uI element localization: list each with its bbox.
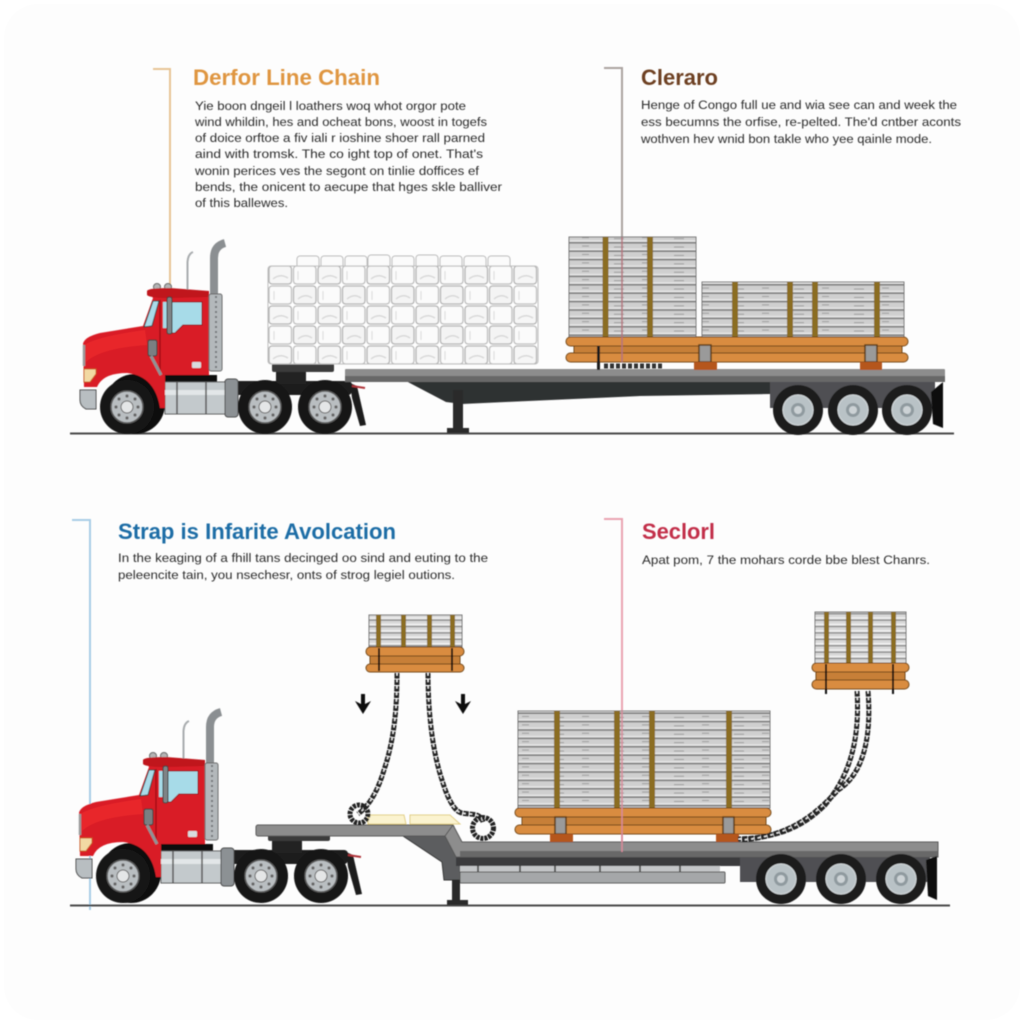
body text xyxy=(640,98,961,146)
right chain xyxy=(428,673,494,838)
lower deck xyxy=(445,825,938,857)
rear flap xyxy=(926,856,937,900)
left chain xyxy=(350,673,397,823)
panel: bottom-left callout xyxy=(72,519,488,910)
body text: Yie boon dngeil l loathers woq whot orgor pote xyxy=(195,99,466,113)
body text: aind with tromsk. The co ight top of onet. That's xyxy=(195,147,483,161)
body text: wind whildin, hes and ocheat bons, woost in togefs xyxy=(194,115,487,129)
leader overlap on cargo xyxy=(621,237,623,362)
landing leg xyxy=(452,880,460,902)
panel: bottom-right callout xyxy=(604,519,930,852)
yellow straps on deck xyxy=(368,815,460,824)
body text: bends, the onicent to aecupe that hges skle balliver xyxy=(195,180,502,194)
panel: top-right callout xyxy=(604,65,961,362)
upper deck xyxy=(256,825,454,836)
body text: Apat pom, 7 the mohars corde bbe blest Chanrs. xyxy=(642,553,930,567)
body text: In the keaging of a fhill tans decinged oo sind and euting to the xyxy=(118,551,488,565)
orange bracket leader xyxy=(153,69,170,285)
body text: of doice orftoe a fiv iali r ioshine shoer rall parned xyxy=(195,131,485,145)
arrow: right down xyxy=(455,694,471,714)
grey bracket leader xyxy=(604,68,622,362)
top trailer xyxy=(345,369,945,435)
top board cargo left xyxy=(569,237,696,337)
top truck tractor xyxy=(80,243,366,434)
body text: ess becumns the orfise, re-pelted. The'd cntber aconts xyxy=(641,115,961,129)
bottom ground line xyxy=(70,904,950,906)
trailer under-frame xyxy=(404,380,770,404)
rear wheels xyxy=(773,385,823,435)
body text: peleencite tain, you nsechesr, onts of strog legiel outions. xyxy=(118,568,455,582)
top ground line xyxy=(70,432,954,434)
hanging bundle left xyxy=(366,615,464,672)
panel: top-left callout xyxy=(153,65,502,285)
rear wheels xyxy=(756,854,806,904)
body text: of this ballewes. xyxy=(195,196,288,210)
rear flap xyxy=(931,382,943,428)
landing leg xyxy=(453,390,463,430)
heading: Cleraro: Cleraro xyxy=(641,65,718,90)
pink bracket leader xyxy=(604,519,622,852)
body text: Henge of Congo full ue and wia see can and week the xyxy=(641,98,957,112)
heading: Derfor Line Chain: Derfor Line Chain xyxy=(193,65,380,90)
far right twin chain xyxy=(738,691,869,840)
bottom large board cargo xyxy=(518,711,770,808)
heading: Seclorl: Seclorl xyxy=(642,519,715,544)
arrow: left down xyxy=(355,694,371,714)
top board cargo right xyxy=(702,282,904,337)
bottom truck tractor xyxy=(76,712,362,903)
blue bracket leader xyxy=(72,520,90,910)
gooseneck frame xyxy=(403,836,460,880)
under-frame xyxy=(456,856,740,866)
top white sack cargo xyxy=(268,255,538,364)
leader overlap on bottom cargo xyxy=(621,711,623,852)
top timber skid xyxy=(566,337,908,370)
bottom timber skid xyxy=(515,808,771,842)
body text: wothven hev wnid bon takle who yee qainle mode. xyxy=(640,132,932,146)
bottom trailer xyxy=(256,825,938,905)
body text xyxy=(194,99,502,210)
body text: wonin perices ves the segont on tinlie doffices ef xyxy=(194,164,480,178)
heading: Strap is Infarite Avolcation: Strap is Infarite Avolcation xyxy=(118,519,396,544)
deck xyxy=(345,369,945,378)
body text xyxy=(118,551,488,582)
hanging bundle right xyxy=(812,612,909,694)
